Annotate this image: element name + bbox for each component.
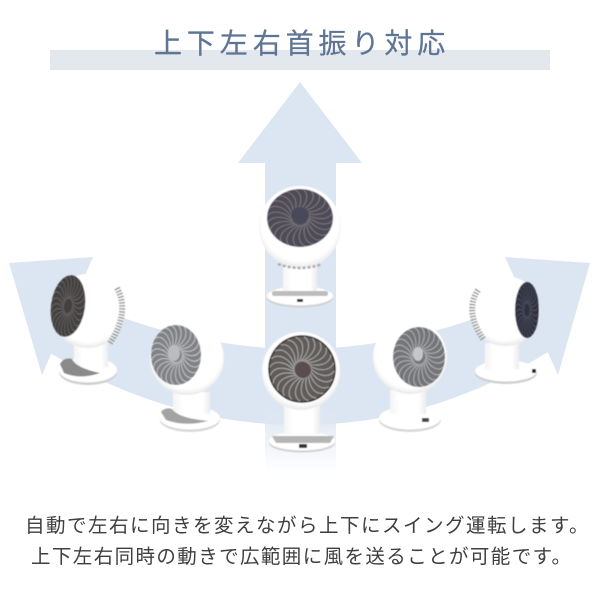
fan: far left (46, 272, 125, 385)
fan: right (373, 320, 447, 432)
title band (50, 50, 550, 70)
description line 1: 自動で左右に向きを変えながら上下にスイング運転します。 (25, 515, 590, 537)
fan: bottom centre (262, 332, 340, 452)
description line 2: 上下左右同時の動きで広範囲に風を送ることが可能です。 (31, 546, 572, 568)
title: 上下左右首振り対応 (154, 28, 450, 59)
fan: top centre (259, 186, 341, 308)
fan: left (150, 321, 224, 432)
fan: far right (470, 276, 540, 384)
arrow: up and down swing (238, 82, 362, 472)
description text (25, 515, 590, 568)
arrow: left and right swing (9, 257, 590, 425)
